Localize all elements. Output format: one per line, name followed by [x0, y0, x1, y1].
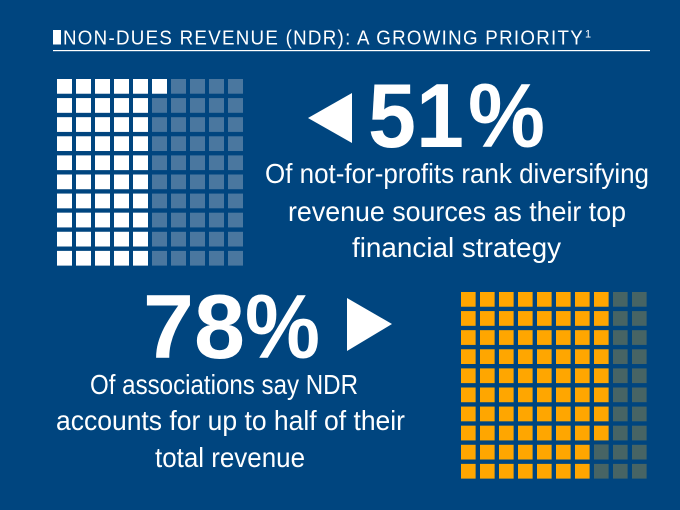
stat: 78%: 78 — [143, 277, 245, 378]
text: 78% description: Of associations say NDR — [90, 369, 358, 400]
waffle chart: 78% — [461, 292, 651, 483]
text: 51% description: revenue sources as their top — [288, 196, 626, 227]
stat: 78%: % — [245, 277, 320, 378]
heading: 1 — [585, 28, 591, 40]
stat: 51%: % — [468, 66, 545, 167]
stat: 78% — [143, 277, 320, 378]
text: 51% description: Of not-for-profits rank diversifying — [265, 158, 649, 189]
text: 78% description: accounts for up to half of their — [56, 405, 405, 436]
text: 78% description — [56, 369, 405, 473]
arrow: left — [308, 93, 352, 143]
stat: 51%: 51 — [368, 66, 464, 167]
text: 51% description: financial strategy — [352, 232, 561, 263]
waffle chart: 51% — [57, 79, 247, 270]
text: 78% description: total revenue — [155, 442, 305, 473]
arrow: right — [347, 298, 392, 351]
stat: 51% — [368, 66, 545, 167]
heading: NON-DUES REVENUE (NDR): A GROWING PRIORITY — [63, 26, 584, 50]
text: 51% description — [265, 158, 649, 263]
